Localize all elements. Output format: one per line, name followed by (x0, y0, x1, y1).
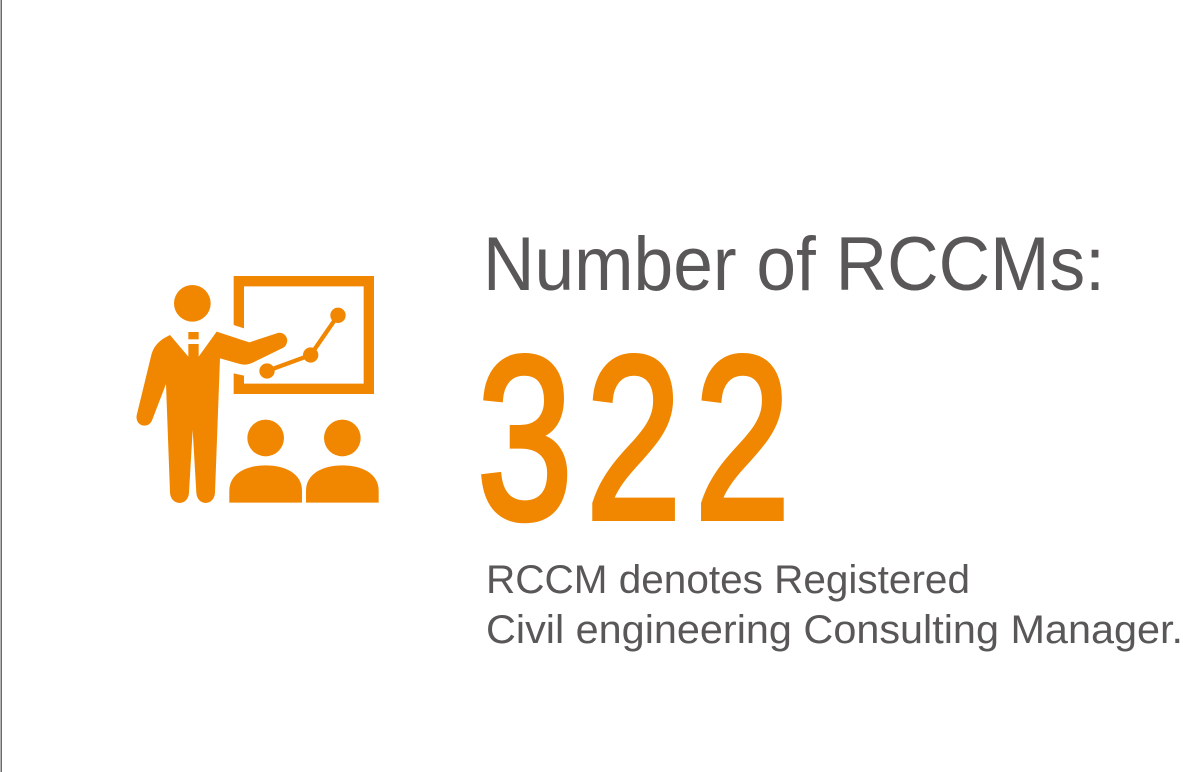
icon: presenter with chart and audience (137, 276, 379, 503)
icon: presenter (137, 285, 287, 503)
description line one: RCCM denotes Registered (486, 558, 970, 602)
description line two: Civil engineering Consulting Manager. (486, 608, 1183, 652)
icon: chart board (234, 276, 374, 394)
big number: 322 (477, 309, 790, 568)
heading: Number of RCCMs: (483, 222, 1105, 307)
icon: rising line chart (259, 308, 346, 379)
icon: audience member left (229, 420, 302, 503)
icon: audience member right (306, 420, 379, 503)
